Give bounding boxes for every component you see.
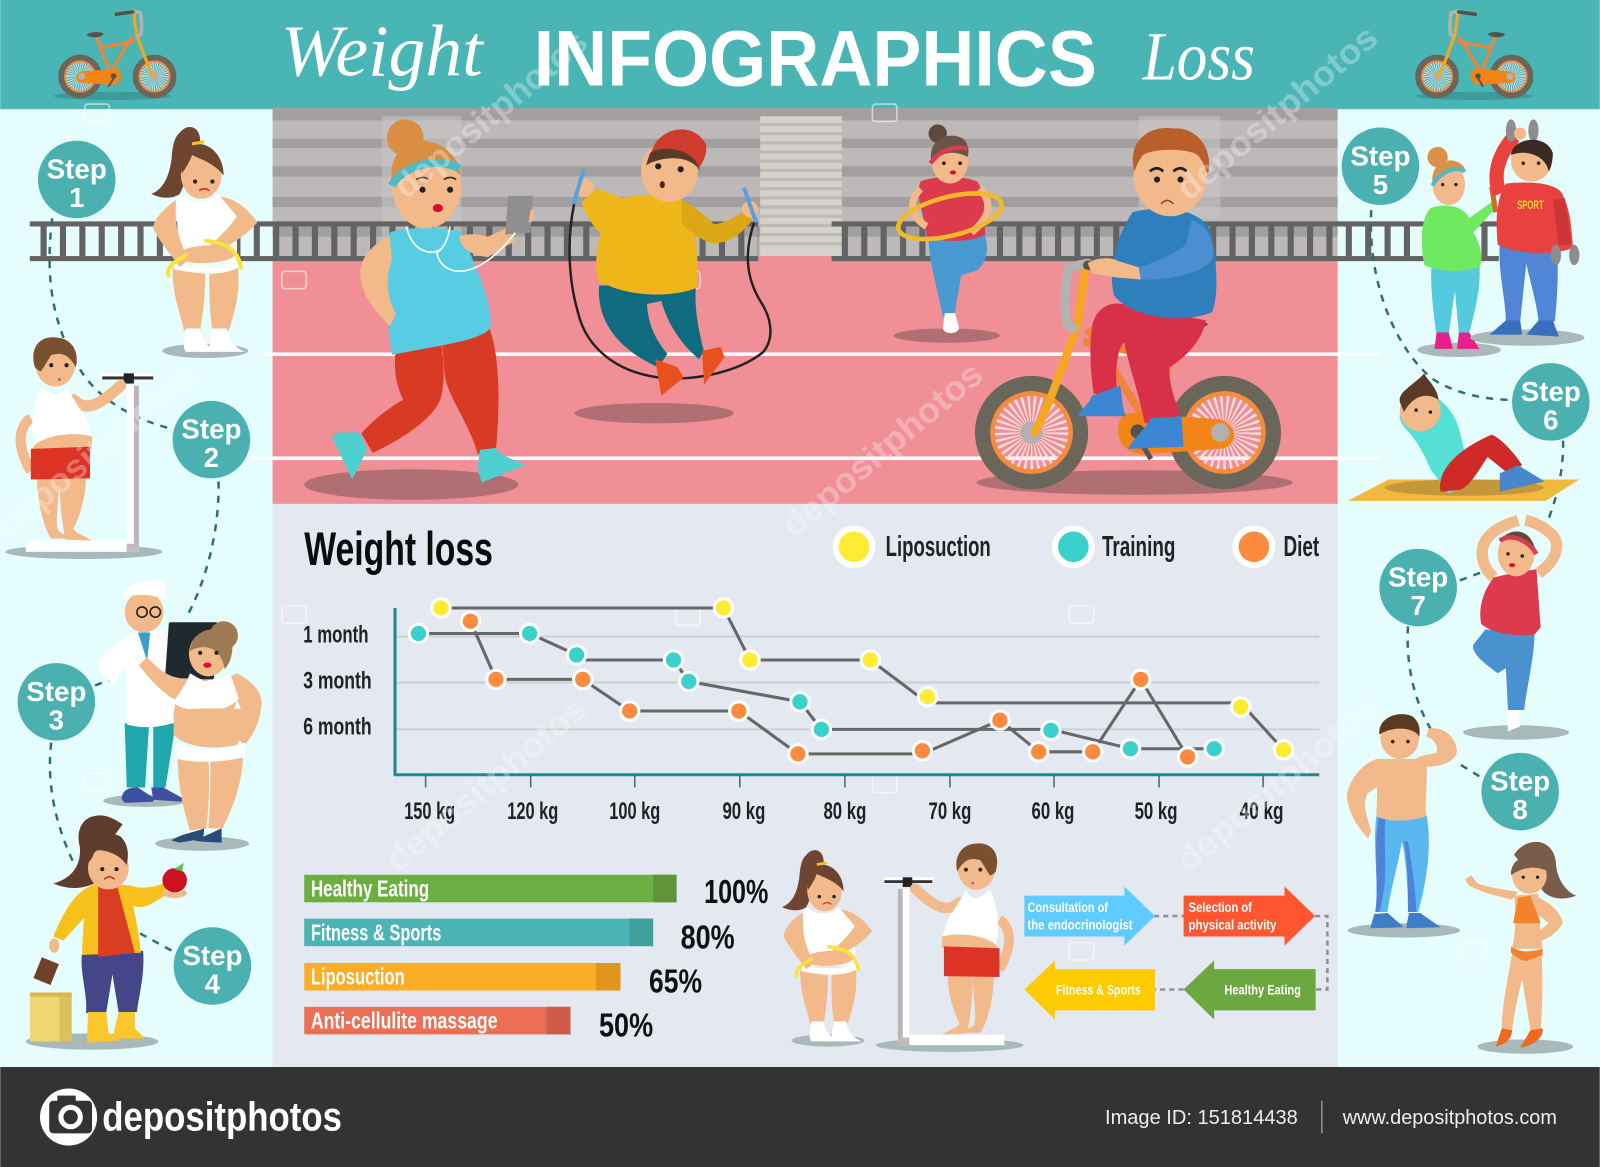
arrow: selection of physical activity: Selection of xyxy=(1189,900,1252,915)
title: Loss (script): Loss xyxy=(1142,19,1255,96)
step badge 3: Step xyxy=(26,676,86,707)
step badge 4: 4 xyxy=(205,969,221,1000)
y axis labels: 1 month xyxy=(303,622,368,649)
step badge 7 xyxy=(1379,549,1457,626)
x axis labels: 150 kg xyxy=(404,798,455,825)
legend: diet: Diet xyxy=(1284,531,1320,563)
legend: training xyxy=(1052,525,1175,568)
character: step 5 man with dumbbells xyxy=(1470,119,1584,346)
step badge 1: Step xyxy=(47,154,107,185)
series: liposuction xyxy=(432,599,1293,759)
panel: running track xyxy=(273,256,1338,504)
x axis labels: 50 kg xyxy=(1135,798,1177,825)
step badge 8 xyxy=(1481,753,1559,830)
icon: header bicycle right xyxy=(1415,11,1533,100)
bar: healthy eating 100%: 100% xyxy=(704,874,768,911)
character: step 7 woman on one leg xyxy=(1463,520,1569,740)
watermarks: depositphotos xyxy=(1169,18,1385,208)
fence right xyxy=(832,221,1499,261)
step badge 2: 2 xyxy=(204,442,219,473)
arrow: healthy eating xyxy=(1184,960,1316,1020)
y axis labels: 3 month xyxy=(303,668,372,695)
step badge 2 xyxy=(173,401,250,478)
arrow: consultation of the endocrinologist: the endocrinologist xyxy=(1027,917,1133,932)
legend: liposuction xyxy=(833,525,991,568)
y axis labels xyxy=(303,622,372,740)
step badge 8: Step xyxy=(1490,766,1550,797)
watermarks xyxy=(0,18,1385,879)
panel: weight loss chart background xyxy=(273,504,1338,1067)
x axis labels: 70 kg xyxy=(929,798,971,825)
fence left xyxy=(30,221,758,261)
arrow: fitness and sports xyxy=(1024,960,1155,1020)
character: cyclist on bicycle xyxy=(976,128,1293,495)
series: diet xyxy=(461,612,1197,766)
footer bar xyxy=(0,1067,1600,1167)
step badge 3: 3 xyxy=(49,704,64,735)
track lane lines xyxy=(251,352,1379,460)
character: hula hoop woman xyxy=(894,124,1006,343)
step badge 6 xyxy=(1512,363,1590,441)
bar: fitness and sports 80% xyxy=(304,919,735,957)
footer logo: depositphotos xyxy=(102,1093,342,1139)
character: step 3 doctor xyxy=(97,580,218,807)
x axis labels xyxy=(404,798,1284,825)
bar: anti-cellulite massage 50%: 50% xyxy=(599,1007,653,1044)
legend: diet xyxy=(1233,525,1320,568)
bar: fitness and sports 80%: 80% xyxy=(681,920,735,957)
character: step 6 sit-ups on mat xyxy=(1348,373,1579,501)
character: running woman xyxy=(304,119,534,500)
x axis labels: 120 kg xyxy=(507,798,558,825)
bar: anti-cellulite massage 50%: Anti-cellulite massage xyxy=(311,1007,498,1033)
title: INFOGRAPHICS: INFOGRAPHICS xyxy=(534,15,1097,103)
bar: liposuction 65%: 65% xyxy=(649,964,702,1001)
arrow: fitness and sports: Fitness & Sports xyxy=(1056,983,1141,998)
watermarks: depositphotos xyxy=(775,355,990,545)
x axis labels: 100 kg xyxy=(609,798,660,825)
watermarks: depositphotos xyxy=(387,23,595,206)
watermarks: depositphotos xyxy=(379,690,595,879)
footer image id: Image ID: 151814438 xyxy=(1105,1107,1298,1129)
character: step 8 slim woman xyxy=(1465,842,1576,1054)
footer divider xyxy=(1321,1101,1322,1133)
character: step 2 man on scale xyxy=(5,337,162,559)
line chart xyxy=(303,599,1319,825)
arrow: healthy eating: Healthy Eating xyxy=(1224,983,1301,998)
flow dashes between arrows xyxy=(1154,916,1327,990)
character: step 5 woman with dumbbells xyxy=(1417,147,1501,357)
header band xyxy=(0,0,1600,109)
y axis labels: 6 month xyxy=(303,713,372,740)
bar: liposuction 65%: Liposuction xyxy=(311,963,405,989)
camera watermark icons xyxy=(85,104,1487,960)
character: woman measuring waist (lower panel) xyxy=(782,850,872,1047)
bar: fitness and sports 80%: Fitness & Sports xyxy=(311,920,441,946)
footer logo xyxy=(40,1088,342,1146)
step badge 4: Step xyxy=(182,940,243,971)
legend: training: Training xyxy=(1102,531,1175,563)
step badge 7: 7 xyxy=(1411,590,1426,621)
title: Weight (script): Weight xyxy=(281,10,484,91)
arrow: selection of physical activity: physical activity xyxy=(1189,917,1277,932)
arrow: selection of physical activity xyxy=(1184,886,1315,946)
character: man on scale (lower panel) xyxy=(876,843,1024,1052)
arrow: consultation of the endocrinologist xyxy=(1024,886,1155,946)
step badge 5 xyxy=(1342,128,1419,205)
x axis labels: 60 kg xyxy=(1032,798,1074,825)
panel: stadium stands xyxy=(273,108,1338,257)
x axis labels: 40 kg xyxy=(1240,798,1284,825)
character: step 3 overweight woman xyxy=(139,621,262,851)
bicycle xyxy=(983,263,1273,481)
step badge 6: Step xyxy=(1521,376,1581,407)
rider xyxy=(1077,128,1216,449)
step badge 5: 5 xyxy=(1373,169,1388,200)
step badge 2: Step xyxy=(181,414,241,445)
bar: healthy eating 100%: Healthy Eating xyxy=(311,876,429,902)
legend: liposuction: Liposuction xyxy=(886,531,991,563)
step badge 7: Step xyxy=(1388,562,1448,593)
character: step 1 woman measuring waist xyxy=(151,127,257,358)
step badge 6: 6 xyxy=(1543,404,1558,435)
series: training xyxy=(409,624,1223,758)
bar: liposuction 65% xyxy=(304,963,702,1001)
character: step 8 muscular man xyxy=(1347,714,1460,937)
arrow: consultation of the endocrinologist: Consultation of xyxy=(1027,900,1108,915)
x axis labels: 80 kg xyxy=(823,798,866,825)
bar: anti-cellulite massage 50% xyxy=(304,1007,653,1044)
step badge 5: Step xyxy=(1350,140,1411,171)
bar: healthy eating 100% xyxy=(304,874,768,911)
character: rope jumper xyxy=(570,129,770,423)
character: step 4 girl with apple xyxy=(26,815,187,1050)
step badge 1: 1 xyxy=(69,182,84,213)
step badge 8: 8 xyxy=(1513,794,1528,825)
chart heading: Weight loss xyxy=(304,523,493,575)
step badge 3 xyxy=(18,663,95,741)
x axis labels: 90 kg xyxy=(722,798,765,825)
step badge 1 xyxy=(38,141,116,218)
footer url: www.depositphotos.com xyxy=(1342,1107,1557,1129)
character: step 5 man with dumbbells: SPORT xyxy=(1517,198,1544,212)
icon: header bicycle left xyxy=(53,11,173,100)
step badge 4 xyxy=(174,927,251,1005)
watermarks: depositphotos xyxy=(1169,690,1385,879)
dashed step connectors xyxy=(50,210,1563,952)
